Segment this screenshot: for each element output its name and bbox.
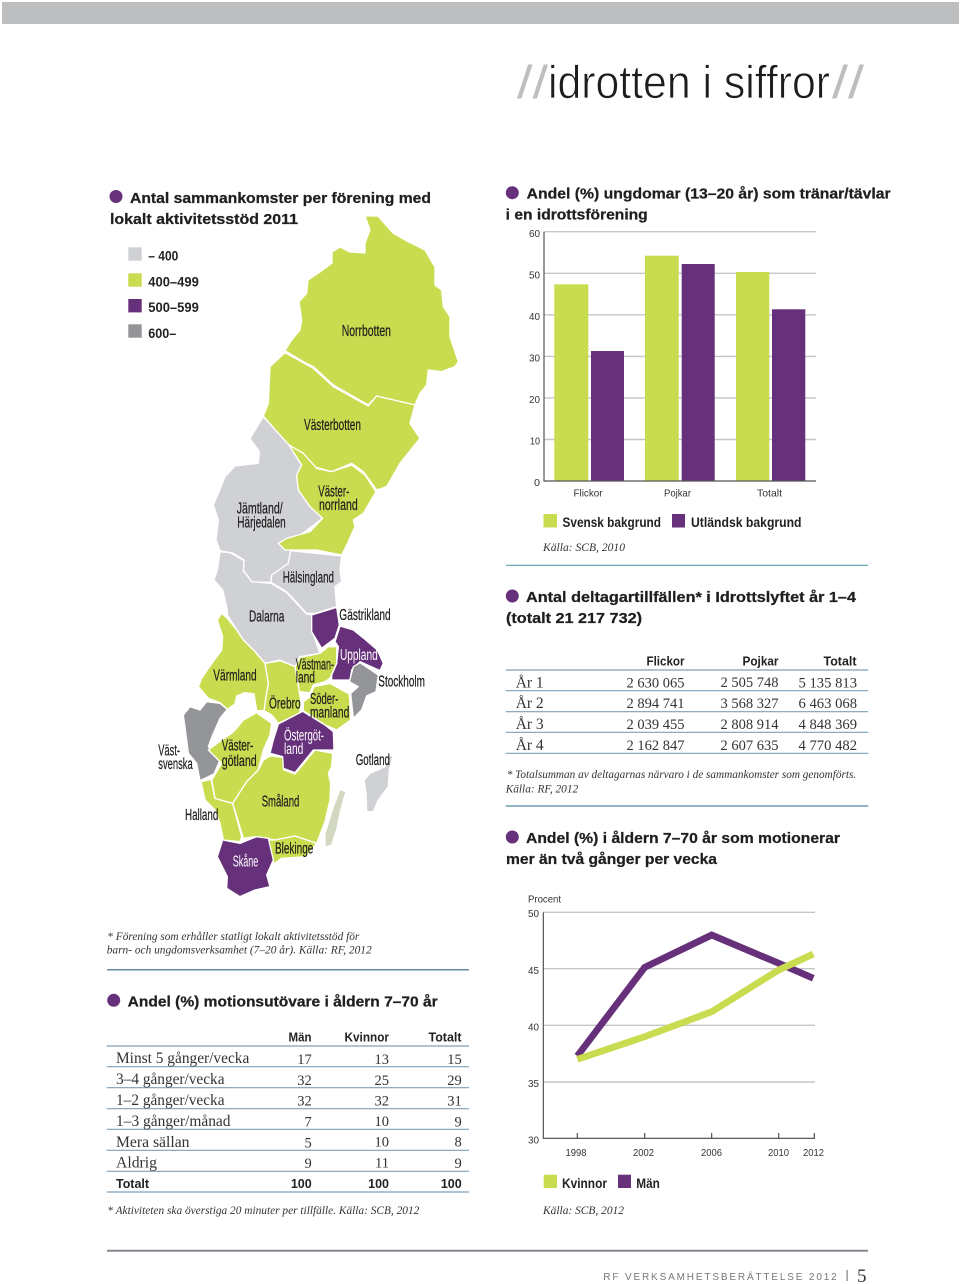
table: motionsutövare: 10 [374,1134,389,1150]
table footnote: * Aktiviteten ska överstiga 20 minuter per tillfälle. Källa: SCB, 2012 [107,1205,420,1217]
table footnote [505,769,856,796]
table: motionsutövare: 13 [374,1052,389,1068]
table: deltagartillfällen: År 4 [516,737,544,754]
map labels: land [284,741,303,758]
bar chart: 40 [529,311,540,323]
table footnote: * Totalsumman av deltagarnas närvaro i de sammankomster som genomförts. [507,769,856,781]
title: idrotten i siffror [548,56,830,108]
map footnote: * Förening som erhåller statligt lokalt aktivitetsstöd för [107,930,360,943]
table: motionsutövare: Totalt [428,1031,462,1045]
table: motionsutövare: Aldrig [116,1154,157,1172]
map labels: norrland [319,497,358,514]
line chart: 2012 [803,1147,824,1159]
line chart: 2006 [701,1147,722,1159]
map legend: 600– [148,326,177,341]
table: deltagartillfällen: 2 607 635 [720,738,778,754]
map labels: götland [222,753,257,770]
heading: deltagartillfällen [506,590,856,627]
table: motionsutövare: Minst 5 gånger/vecka [116,1050,249,1067]
map labels: Gotland [356,752,390,769]
table: deltagartillfällen: 3 568 327 [720,696,778,712]
line chart legend: Män [636,1176,660,1191]
line chart [528,894,824,1159]
map labels: Västerbotten [304,417,361,434]
map legend: – 400 [148,249,178,264]
bar chart: Pojkar [664,488,691,500]
map of Sweden [183,216,458,897]
line chart: 45 [528,965,539,977]
map legend [128,247,199,341]
table: motionsutövare: 32 [374,1094,389,1110]
map labels: Hälsingland [283,570,334,587]
line chart: Procent [528,894,561,906]
table: deltagartillfällen: Totalt [824,655,857,669]
table: motionsutövare: Män [288,1031,312,1045]
table: deltagartillfällen: År 1 [516,674,544,692]
table: deltagartillfällen: 2 894 741 [626,696,684,712]
table: motionsutövare: 15 [447,1052,462,1068]
map labels: Småland [262,794,299,811]
line chart: 40 [528,1022,539,1034]
heading: sammankomster per förening: lokalt aktivitetsstöd 2011 [110,212,298,228]
map labels: Söder- [310,691,338,708]
table: motionsutövare: 8 [454,1134,462,1150]
line chart source: Källa: SCB, 2012 [542,1205,624,1217]
map footnote [107,930,372,956]
table: motionsutövare: 31 [447,1094,462,1110]
table: deltagartillfällen: Flickor [646,655,685,669]
map labels: Örebro [269,694,301,712]
line chart legend [544,1175,660,1191]
map labels: Norrbotten [342,323,391,340]
map labels: land [296,670,315,687]
table: deltagartillfällen: Pojkar [742,655,779,669]
bar chart: 10 [530,436,540,448]
line: Kvinnor [577,954,813,1059]
table: deltagartillfällen: 2 162 847 [626,738,684,754]
table: motionsutövare: 11 [375,1156,389,1172]
bar chart: 0 [534,477,540,489]
map labels: Gästrikland [339,607,391,624]
table: motionsutövare: 100 [368,1177,389,1191]
table: deltagartillfällen: År 3 [516,716,544,733]
heading: motionsutövare: Andel (%) motionsutövare i åldern 7–70 år [128,995,438,1011]
map labels [158,323,425,871]
map labels: manland [310,704,349,721]
heading: ungdomar: i en idrottsförening [506,207,648,223]
table: motionsutövare: 9 [304,1156,312,1172]
line chart: 2002 [633,1147,654,1159]
heading: deltagartillfällen: Antal deltagartillfällen* i Idrottslyftet år 1–4 [526,590,856,606]
top grey band [2,2,959,24]
table: motionsutövare: 32 [297,1073,312,1089]
table: motionsutövare: Mera sällan [116,1134,190,1151]
bar chart: Flickor [574,488,603,500]
bar chart source: Källa: SCB, 2010 [542,542,625,554]
table: deltagartillfällen: 5 135 813 [798,676,857,692]
table: motionsutövare: 100 [291,1177,312,1191]
footer [603,1266,866,1284]
table: motionsutövare: 32 [297,1094,312,1110]
map labels: Härjedalen [237,515,286,532]
bar chart: 50 [529,270,540,282]
heading: deltagartillfällen: (totalt 21 217 732) [506,611,642,627]
table: deltagartillfällen: 2 039 455 [626,717,684,733]
heading: motionerar [506,830,840,868]
line chart: 30 [528,1134,539,1146]
table: deltagartillfällen: År 2 [516,695,544,712]
map labels: Väster- [318,484,349,501]
table: motionsutövare: Kvinnor [344,1031,389,1045]
table: deltagartillfällen: 2 505 748 [720,675,778,691]
footer: RF VERKSAMHETSBERÄTTELSE 2012 [603,1271,837,1283]
table: deltagartillfällen: 6 463 068 [798,696,857,712]
line: Män [577,935,813,1056]
line chart legend: Kvinnor [562,1176,608,1191]
table: motionsutövare: 17 [297,1052,312,1068]
map labels: Dalarna [249,609,285,626]
line chart: 2010 [768,1147,789,1159]
map legend: 500–599 [148,300,199,315]
table: deltagartillfällen: 4 848 369 [798,717,857,733]
table: motionsutövare: 7 [304,1114,312,1130]
table: motionsutövare: 29 [447,1073,462,1089]
table: motionsutövare: 9 [454,1114,462,1130]
map labels: svenska [158,756,193,773]
bar chart [529,228,816,500]
map labels: Väst- [158,743,180,760]
table: motionsutövare: 9 [454,1156,462,1172]
table: motionsutövare [107,1031,469,1192]
bar chart legend: Svensk bakgrund [562,515,661,530]
table: motionsutövare: 5 [304,1136,312,1152]
title: // [517,56,548,108]
table: motionsutövare: 1–2 gånger/vecka [116,1092,225,1109]
heading: sammankomster per förening [110,190,431,228]
bar chart: 20 [529,394,540,406]
table: motionsutövare: 3–4 gånger/vecka [116,1071,225,1088]
map labels: Uppland [340,647,378,664]
table: motionsutövare: 1–3 gånger/månad [116,1113,231,1130]
line chart: 1998 [566,1147,587,1159]
title: // [832,56,864,108]
map labels: Östergöt- [284,727,324,745]
line chart: 50 [528,908,539,920]
table: deltagartillfällen: 2 808 914 [720,717,779,733]
bar chart legend: Utländsk bakgrund [691,515,802,530]
map labels: Väster- [222,738,253,755]
map footnote: barn- och ungdomsverksamhet (7–20 år). Källa: RF, 2012 [107,943,372,956]
table: deltagartillfällen: 4 770 482 [798,738,857,754]
table: motionsutövare: Totalt [116,1177,150,1191]
heading: ungdomar [506,186,891,223]
table: motionsutövare: 25 [374,1073,389,1089]
map labels: Halland [185,807,218,824]
bar chart legend [544,514,802,530]
table: motionsutövare: 100 [441,1177,462,1191]
map labels: Västman- [296,656,334,673]
map legend: 400–499 [148,274,199,290]
table: deltagartillfällen: 2 630 065 [626,676,684,692]
heading: sammankomster per förening: Antal sammankomster per förening med [130,191,431,207]
map labels: Stockholm [378,674,425,691]
bar chart: 30 [529,352,540,364]
map labels: Värmland [213,668,257,685]
bar chart: 60 [529,228,540,240]
bar chart: Totalt [757,488,782,500]
map labels: Blekinge [275,840,313,857]
heading: motionerar: Andel (%) i åldern 7–70 år som motionerar [526,831,840,847]
heading: motionerar: mer än två gånger per vecka [506,852,718,868]
table footnote: Källa: RF, 2012 [505,784,578,796]
table: motionsutövare: 10 [374,1114,389,1130]
map labels: Jämtland/ [237,500,283,517]
heading: ungdomar: Andel (%) ungdomar (13–20 år) som tränar/tävlar [527,186,891,202]
map labels: Skåne [233,854,258,871]
line chart: 35 [528,1078,539,1090]
table: deltagartillfällen [506,655,868,754]
